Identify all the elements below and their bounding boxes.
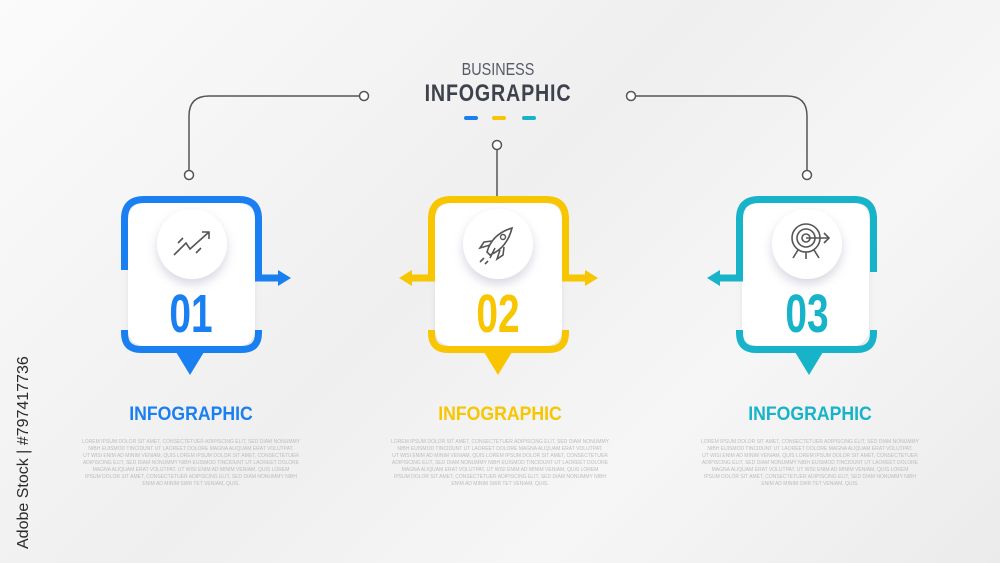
text block: step 01 bbox=[82, 439, 301, 487]
number 01: 01 bbox=[169, 283, 213, 343]
text block: step 02: ENIM AD MINIM SWR TET VENIAM, QUIS. bbox=[451, 481, 549, 487]
text block: step 03: UT WISI ENIM AD MINIM VENIAM, QUIS LOREM IPSUM DOLOR SIT AMET, CONSECTETUER bbox=[702, 453, 918, 459]
connector: left bbox=[184, 92, 368, 180]
text block: step 03: LOREM IPSUM DOLOR SIT AMET, CONSECTETUER ADIPISCING ELIT, SED DIAM NONUMMY bbox=[701, 439, 920, 445]
panel: step 02 bbox=[399, 200, 598, 375]
panel: step 01 bbox=[124, 200, 291, 375]
icon: rocket bbox=[463, 209, 533, 279]
text block: step 02: LOREM IPSUM DOLOR SIT AMET, CONSECTETUER ADIPISCING ELIT, SED DIAM NONUMMY bbox=[391, 439, 610, 445]
title: INFOGRAPHIC bbox=[425, 79, 571, 106]
heading: step 02: INFOGRAPHIC bbox=[438, 402, 562, 424]
panel: step 03 bbox=[707, 200, 874, 375]
text block: step 02: IPSUM DOLOR SIT AMET, CONSECTETUER ADIPISCING ELIT, SED DIAM NONUMMY NIBH bbox=[394, 474, 606, 480]
title bbox=[425, 60, 571, 120]
heading: step 01: INFOGRAPHIC bbox=[129, 402, 253, 424]
text block: step 01: MAGNA ALIQUAM ERAT VOLUTPAT. UT WISI ENIM AD MINIM VENIAM, QUIS LOREM bbox=[93, 467, 289, 473]
text block: step 01: LOREM IPSUM DOLOR SIT AMET, CONSECTETUER ADIPISCING ELIT, SED DIAM NONUMMY bbox=[82, 439, 301, 445]
icon: growth arrow bbox=[157, 209, 227, 279]
connector: middle bbox=[492, 140, 502, 196]
text block: step 02: NIBH EUISMOD TINCIDUNT UT LAOREET DOLORE MAGNA ALIQUAM ERAT VOLUTPAT. bbox=[397, 446, 603, 452]
text block: step 02: ADIPISCING ELIT, SED DIAM NONUMMY NIBH EUISMOD TINCIDUNT UT LAOREET DOLORE bbox=[392, 460, 609, 466]
text block: step 03 bbox=[701, 439, 920, 487]
text block: step 01: UT WISI ENIM AD MINIM VENIAM, QUIS LOREM IPSUM DOLOR SIT AMET, CONSECTETUER bbox=[83, 453, 299, 459]
watermark id: Adobe Stock | #797417736 bbox=[15, 356, 32, 549]
text block: step 01: ADIPISCING ELIT, SED DIAM NONUMMY NIBH EUISMOD TINCIDUNT UT LAOREET DOLORE bbox=[83, 460, 300, 466]
number 02: 02 bbox=[476, 283, 520, 343]
connector: right bbox=[626, 92, 812, 180]
number 03: 03 bbox=[785, 283, 829, 343]
text block: step 03: IPSUM DOLOR SIT AMET, CONSECTETUER ADIPISCING ELIT, SED DIAM NONUMMY NIBH bbox=[704, 474, 916, 480]
text block: step 01: IPSUM DOLOR SIT AMET, CONSECTETUER ADIPISCING ELIT, SED DIAM NONUMMY NIBH bbox=[85, 474, 297, 480]
text block: step 01: ENIM AD MINIM SWR TET VENIAM, QUIS. bbox=[142, 481, 240, 487]
text block: step 03: ENIM AD MINIM SWR TET VENIAM, QUIS. bbox=[761, 481, 859, 487]
text block: step 02: MAGNA ALIQUAM ERAT VOLUTPAT. UT WISI ENIM AD MINIM VENIAM, QUIS LOREM bbox=[402, 467, 598, 473]
text block: step 02 bbox=[391, 439, 610, 487]
title: BUSINESS bbox=[462, 60, 534, 79]
text block: step 03: NIBH EUISMOD TINCIDUNT UT LAOREET DOLORE MAGNA ALIQUAM ERAT VOLUTPAT. bbox=[707, 446, 913, 452]
heading: step 03: INFOGRAPHIC bbox=[748, 402, 872, 424]
text block: step 01: NIBH EUISMOD TINCIDUNT UT LAOREET DOLORE MAGNA ALIQUAM ERAT VOLUTPAT. bbox=[88, 446, 294, 452]
text block: step 03: MAGNA ALIQUAM ERAT VOLUTPAT. UT WISI ENIM AD MINIM VENIAM, QUIS LOREM bbox=[712, 467, 908, 473]
icon: target bbox=[772, 209, 842, 279]
text block: step 02: UT WISI ENIM AD MINIM VENIAM, QUIS LOREM IPSUM DOLOR SIT AMET, CONSECTETUER bbox=[392, 453, 608, 459]
text block: step 03: ADIPISCING ELIT, SED DIAM NONUMMY NIBH EUISMOD TINCIDUNT UT LAOREET DOLORE bbox=[702, 460, 919, 466]
